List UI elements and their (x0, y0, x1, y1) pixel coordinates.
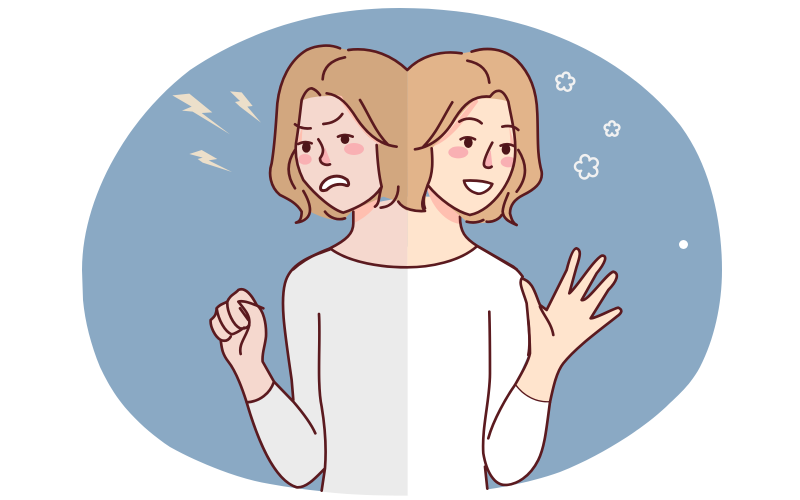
neck and collar lines (293, 212, 517, 269)
left arm sleeve (247, 382, 325, 487)
right face lines (415, 91, 518, 215)
fist finger lines (217, 301, 263, 354)
figure: two heads (270, 46, 542, 269)
left neck (330, 197, 407, 267)
hair outlines (270, 46, 542, 225)
right neck (407, 197, 477, 267)
neck shadows (353, 187, 460, 224)
icon: lightning bolts (172, 91, 261, 172)
right hair (407, 49, 542, 225)
left eyes (302, 135, 349, 153)
torso left half (283, 247, 408, 496)
left face (296, 96, 382, 213)
figure: body and arms (211, 247, 621, 496)
right hair shadow (433, 98, 516, 150)
left mouth (321, 176, 349, 191)
right mouth (464, 181, 492, 194)
right face (428, 98, 515, 215)
left hair shadow (297, 95, 381, 145)
left face lines (295, 88, 397, 213)
body outlines (247, 247, 553, 491)
icon: white dot (679, 240, 688, 249)
left fist (211, 289, 274, 402)
right eyes (464, 137, 510, 155)
torso right half (408, 247, 529, 496)
right arm sleeve (483, 385, 550, 485)
right hand (515, 248, 621, 402)
blush (298, 143, 516, 168)
background blob (82, 8, 722, 495)
icon: flowers (555, 71, 619, 180)
left hair (270, 46, 408, 223)
